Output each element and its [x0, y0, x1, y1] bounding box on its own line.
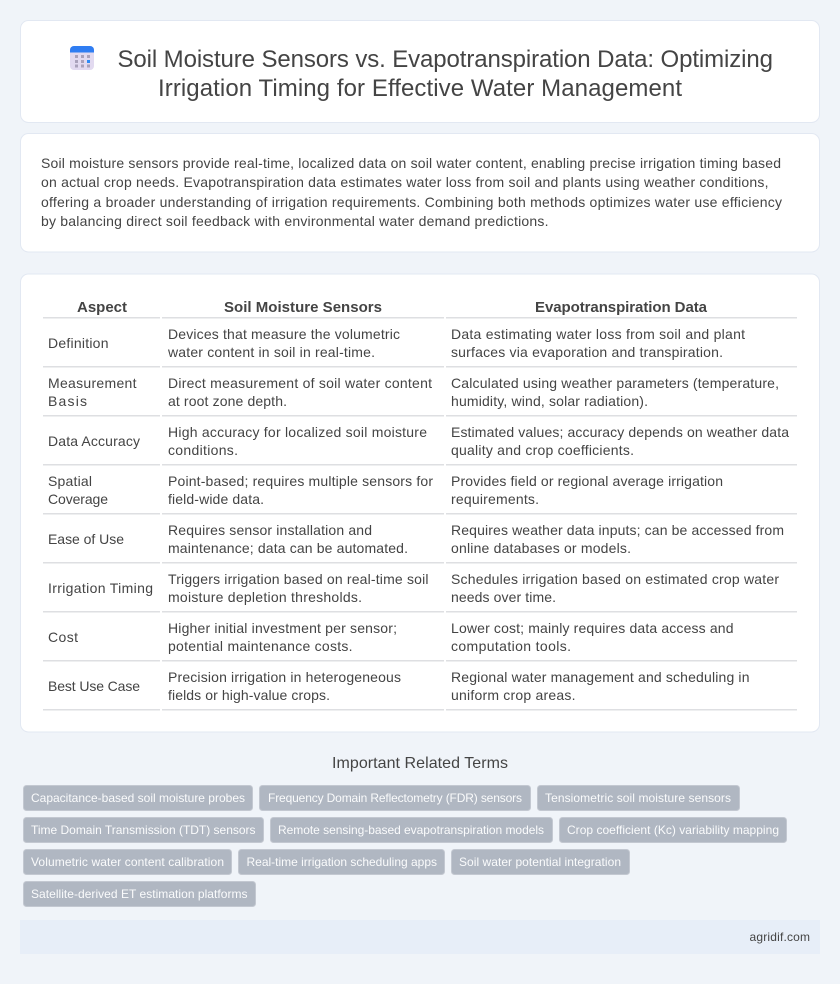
- row: measurement basis: at root zone depth.: [168, 393, 287, 409]
- tag: Crop coefficient (Kc) variability mapping: [567, 823, 779, 837]
- row: measurement basis: Measurement: [48, 375, 137, 391]
- row: measurement basis: Direct measurement of soil water content: [168, 375, 432, 391]
- tag: [238, 850, 444, 874]
- tag: [24, 786, 252, 810]
- tag: [560, 818, 786, 842]
- row: cost: potential maintenance costs.: [168, 638, 352, 654]
- row: cost: Higher initial investment per sensor;: [168, 620, 397, 636]
- table header row: Aspect: [77, 299, 127, 316]
- tag: Capacitance-based soil moisture probes: [31, 791, 245, 805]
- panel: summary text: [20, 134, 820, 252]
- tag: Tensiometric soil moisture sensors: [545, 791, 731, 805]
- icon: calendar: [70, 46, 94, 70]
- tag: [260, 786, 530, 810]
- row: best use case: uniform crop areas.: [451, 687, 576, 703]
- row: measurement basis: humidity, wind, solar radiation).: [451, 393, 648, 409]
- row: definition: surfaces via evaporation and transpiration.: [451, 344, 723, 360]
- row: ease of use: Requires sensor installation and: [168, 522, 372, 538]
- row: ease of use: Requires weather data inputs; can be accessed from: [451, 522, 784, 538]
- row: cost: computation tools.: [451, 638, 571, 654]
- row: data accuracy: Estimated values; accuracy depends on weather data: [451, 424, 789, 440]
- row: data accuracy: quality and crop coefficients.: [451, 442, 634, 458]
- row: irrigation timing: needs over time.: [451, 589, 556, 605]
- tag: Satellite-derived ET estimation platforms: [31, 887, 248, 901]
- row: best use case: Precision irrigation in heterogeneous: [168, 669, 401, 685]
- panel: summary text: on actual crop needs. Evapotranspiration data estimates water loss from soil and plants using weather conditions,: [41, 174, 768, 190]
- row: cost: Cost: [48, 629, 78, 645]
- row: measurement basis: Basis: [48, 393, 87, 409]
- footer: [20, 920, 820, 954]
- tag: [24, 818, 264, 842]
- row: definition: Data estimating water loss from soil and plant: [451, 326, 745, 342]
- row: spatial coverage: Provides field or regional average irrigation: [451, 473, 723, 489]
- heading: related terms: Important Related Terms: [332, 755, 508, 772]
- tag: [538, 786, 740, 810]
- row: definition: Definition: [48, 335, 108, 351]
- row: measurement basis: Calculated using weather parameters (temperature,: [451, 375, 779, 391]
- tag: Remote sensing-based evapotranspiration models: [278, 823, 544, 837]
- footer: agridif.com: [750, 930, 810, 944]
- tag: [24, 850, 232, 874]
- row: best use case: Best Use Case: [48, 678, 140, 694]
- row: irrigation timing: Schedules irrigation based on estimated crop water: [451, 571, 779, 587]
- row: ease of use: maintenance; data can be automated.: [168, 540, 408, 556]
- tag group: related terms: [24, 786, 786, 906]
- row: spatial coverage: field-wide data.: [168, 491, 264, 507]
- row: best use case: [43, 669, 797, 710]
- row: measurement basis: [43, 375, 797, 416]
- panel: comparison table: [20, 274, 820, 732]
- tag: [270, 818, 552, 842]
- row: ease of use: [43, 522, 797, 564]
- row: irrigation timing: [43, 571, 797, 612]
- row: irrigation timing: moisture depletion thresholds.: [168, 589, 362, 605]
- row: spatial coverage: Spatial: [48, 473, 92, 489]
- row: definition: Devices that measure the volumetric: [168, 326, 400, 342]
- tag: Real-time irrigation scheduling apps: [246, 855, 437, 869]
- table header row: Evapotranspiration Data: [535, 299, 708, 316]
- row: data accuracy: Data Accuracy: [48, 433, 140, 449]
- title: Soil Moisture Sensors vs. Evapotranspiration Data: Optimizing: [118, 46, 773, 73]
- panel: summary text: offering a broader understanding of irrigation requirements. Combining both methods optimizes water use efficiency: [41, 194, 782, 210]
- row: ease of use: online databases or models.: [451, 540, 631, 556]
- panel: summary text: Soil moisture sensors provide real-time, localized data on soil water content, enabling precise irrigation timing based: [41, 155, 781, 171]
- row: ease of use: Ease of Use: [48, 531, 124, 547]
- table header row: [43, 299, 797, 318]
- tag: Soil water potential integration: [459, 855, 621, 869]
- tag: [452, 850, 630, 874]
- tag: [24, 882, 256, 906]
- row: data accuracy: conditions.: [168, 442, 238, 458]
- row: irrigation timing: Irrigation Timing: [48, 580, 153, 596]
- table header row: Soil Moisture Sensors: [224, 299, 382, 316]
- row: data accuracy: High accuracy for localized soil moisture: [168, 424, 427, 440]
- row: spatial coverage: Coverage: [48, 491, 108, 507]
- title: Irrigation Timing for Effective Water Management: [158, 75, 682, 102]
- row: definition: [43, 326, 797, 368]
- panel: header: [20, 20, 820, 122]
- row: cost: Lower cost; mainly requires data access and: [451, 620, 734, 636]
- tag: Frequency Domain Reflectometry (FDR) sensors: [268, 791, 522, 805]
- row: spatial coverage: Point-based; requires multiple sensors for: [168, 473, 433, 489]
- title: [118, 46, 773, 102]
- panel: summary text: by balancing direct soil feedback with environmental water demand predictions.: [41, 213, 548, 229]
- row: spatial coverage: requirements.: [451, 491, 539, 507]
- row: best use case: fields or high-value crops.: [168, 687, 330, 703]
- row: data accuracy: [43, 424, 797, 466]
- row: irrigation timing: Triggers irrigation based on real-time soil: [168, 571, 428, 587]
- row: definition: water content in soil in real-time.: [167, 344, 375, 360]
- row: best use case: Regional water management and scheduling in: [451, 669, 750, 685]
- tag: Time Domain Transmission (TDT) sensors: [31, 823, 256, 837]
- tag: Volumetric water content calibration: [31, 855, 224, 869]
- row: spatial coverage: [43, 473, 797, 514]
- row: cost: [43, 620, 797, 662]
